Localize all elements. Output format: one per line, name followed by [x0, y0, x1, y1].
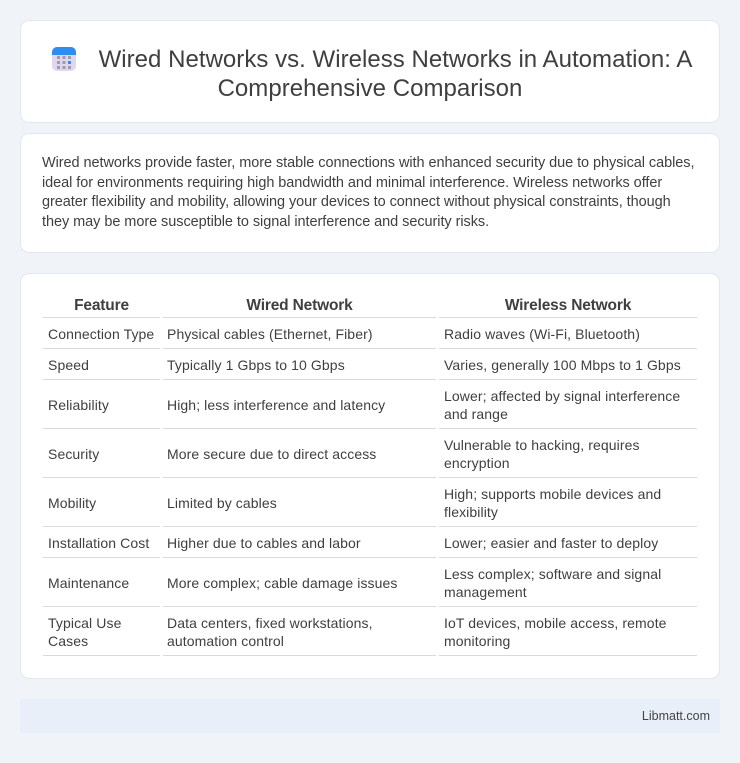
comparison table: monitoring: [444, 633, 510, 649]
title: Comprehensive Comparison: [218, 75, 522, 102]
comparison table: Typical Use: [48, 615, 121, 631]
comparison table: Security: [48, 446, 99, 462]
comparison table: Lower; easier and faster to deploy: [444, 535, 658, 551]
comparison table: Physical cables (Ethernet, Fiber): [167, 326, 373, 342]
comparison table: Radio waves (Wi-Fi, Bluetooth): [444, 326, 640, 342]
comparison table: Limited by cables: [167, 495, 277, 511]
comparison table: More secure due to direct access: [167, 446, 376, 462]
comparison table: flexibility: [444, 504, 498, 520]
comparison table: Speed: [48, 357, 89, 373]
comparison table: Varies, generally 100 Mbps to 1 Gbps: [444, 357, 681, 373]
footer source text: Libmatt.com: [642, 709, 710, 723]
header card: [20, 20, 720, 123]
title: [98, 46, 692, 102]
comparison table: automation control: [167, 633, 284, 649]
footer bar: [20, 699, 720, 733]
comparison table: High; less interference and latency: [167, 397, 385, 413]
comparison table: Mobility: [48, 495, 96, 511]
comparison table: Reliability: [48, 397, 109, 413]
comparison table: Wireless Network: [505, 297, 631, 314]
intro text: ideal for environments requiring high bandwidth and minimal interference. Wireless networks offer: [42, 174, 662, 190]
comparison table: encryption: [444, 455, 510, 471]
intro text: greater flexibility and mobility, allowing your devices to connect without physical constraints, though: [42, 194, 671, 210]
comparison table: management: [444, 584, 527, 600]
comparison table card: [20, 273, 720, 679]
icon: calendar grid: [52, 47, 76, 71]
comparison table: Feature: [74, 297, 129, 314]
comparison table: Higher due to cables and labor: [167, 535, 361, 551]
comparison table: Cases: [48, 633, 88, 649]
comparison table: [43, 297, 697, 656]
comparison table: Maintenance: [48, 575, 129, 591]
comparison table: High; supports mobile devices and: [444, 486, 661, 502]
comparison table: Lower; affected by signal interference: [444, 388, 680, 404]
comparison table: Installation Cost: [48, 535, 149, 551]
comparison table: Connection Type: [48, 326, 154, 342]
intro text: they may be more susceptible to signal interference and security risks.: [42, 214, 489, 230]
comparison table: Wired Network: [246, 297, 353, 314]
intro text card: [20, 133, 720, 253]
comparison table: Less complex; software and signal: [444, 566, 661, 582]
intro text: [42, 155, 694, 230]
title: Wired Networks vs. Wireless Networks in Automation: A: [99, 46, 692, 73]
comparison table: and range: [444, 406, 508, 422]
comparison table: Data centers, fixed workstations,: [167, 615, 373, 631]
comparison table: More complex; cable damage issues: [167, 575, 398, 591]
comparison table: Typically 1 Gbps to 10 Gbps: [167, 357, 345, 373]
comparison table: IoT devices, mobile access, remote: [444, 615, 667, 631]
comparison table: Vulnerable to hacking, requires: [444, 437, 640, 453]
intro text: Wired networks provide faster, more stable connections with enhanced security due to physical cables,: [42, 155, 694, 171]
